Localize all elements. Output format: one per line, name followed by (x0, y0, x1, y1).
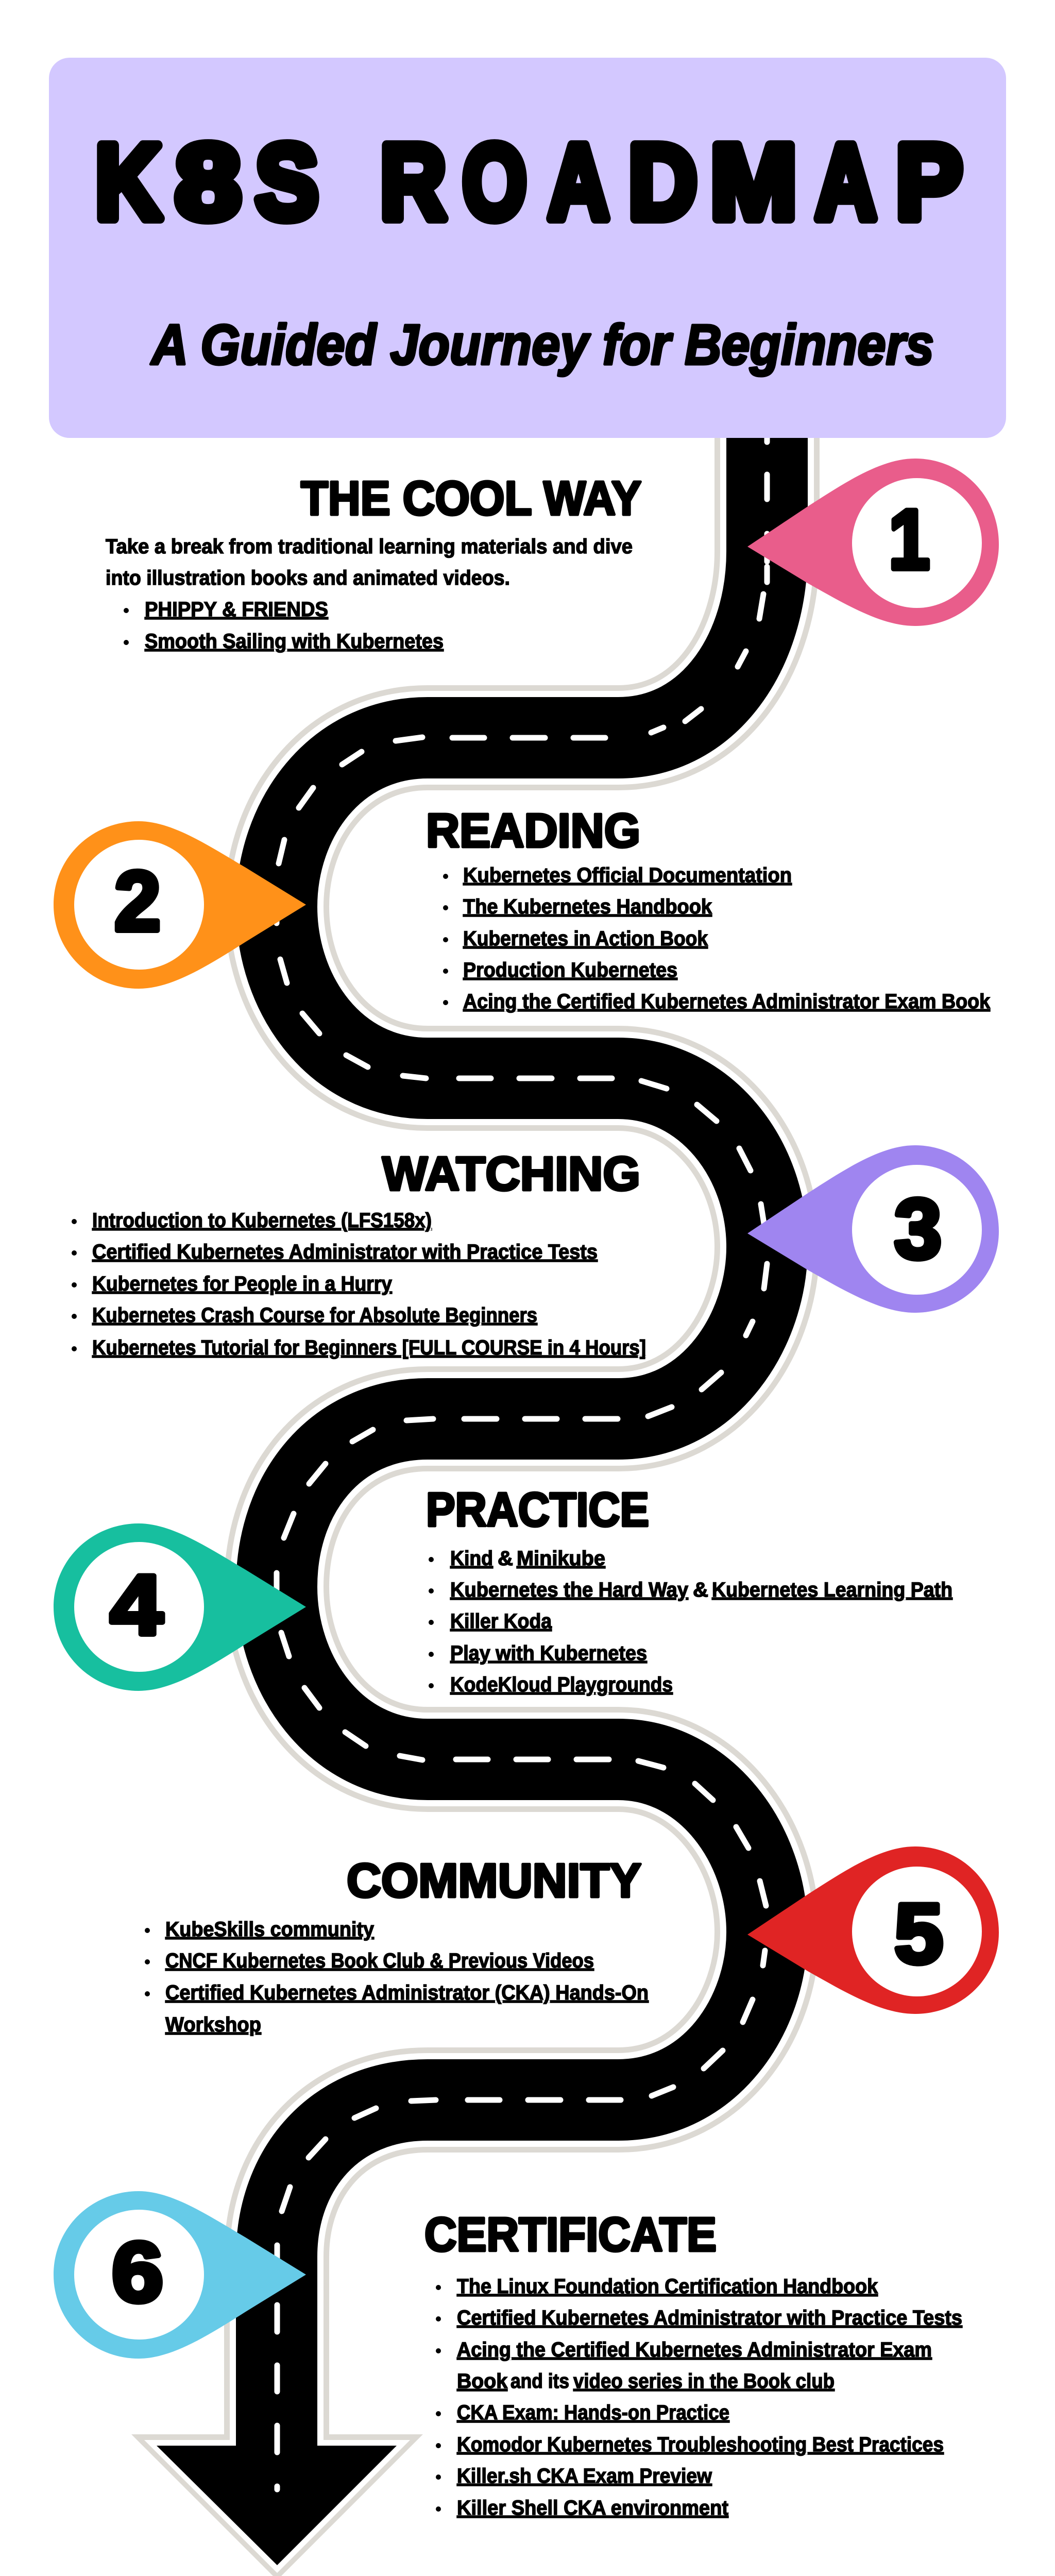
main title: A (815, 123, 876, 241)
link list: Acing the Certified Kubernetes Administrator Exam Book (463, 990, 991, 1013)
main title: K (95, 123, 161, 241)
link list: Minikube (517, 1547, 605, 1570)
link list: Smooth Sailing with Kubernetes (145, 630, 444, 653)
main title: M (710, 123, 797, 241)
link list (429, 1547, 952, 1696)
link list: Play with Kubernetes (450, 1642, 647, 1665)
pin 4: 4 (110, 1557, 163, 1652)
section 6: certificate (424, 2208, 962, 2519)
link list: Certified Kubernetes Administrator (CKA) Hands-On (165, 1981, 649, 2004)
header panel (49, 58, 1006, 438)
link list: Kubernetes Crash Course for Absolute Beginners (92, 1304, 537, 1327)
pin 5: 5 (894, 1886, 943, 1981)
link list: Production Kubernetes (463, 959, 677, 981)
link list (72, 1209, 646, 1359)
heading: PRACTICE (426, 1483, 649, 1536)
pin 4 (54, 1523, 306, 1691)
link list: Acing the Certified Kubernetes Administrator Exam (457, 2338, 932, 2361)
link list: CNCF Kubernetes Book Club & Previous Videos (165, 1950, 594, 1972)
link list: The Kubernetes Handbook (463, 895, 712, 918)
link list: Killer Koda (450, 1610, 552, 1633)
link list (124, 598, 444, 653)
link list: Book (457, 2370, 508, 2393)
link list: Introduction to Kubernetes (LFS158x) (92, 1209, 432, 1232)
main title (95, 123, 962, 241)
link list: Kubernetes Official Documentation (463, 864, 792, 887)
link list: Kubernetes Learning Path (712, 1579, 952, 1601)
link list: Komodor Kubernetes Troubleshooting Best Practices (457, 2433, 944, 2456)
link list: Kind (450, 1547, 493, 1570)
link list: Kubernetes Tutorial for Beginners [FULL COURSE in 4 Hours] (92, 1336, 646, 1359)
main title: D (628, 123, 697, 241)
section 5: community (145, 1854, 649, 2036)
pin 1 (747, 459, 999, 626)
link list: video series in the Book club (573, 2370, 835, 2393)
pin 6 (54, 2191, 306, 2359)
section 3: watching (72, 1147, 646, 1359)
link list: Killer Shell CKA environment (457, 2497, 728, 2519)
intro text: Take a break from traditional learning materials and dive (106, 535, 633, 558)
main title: A (548, 123, 609, 241)
pin 6: 6 (112, 2225, 163, 2319)
link list: The Linux Foundation Certification Handbook (457, 2275, 878, 2298)
winding road with arrow head (131, 433, 767, 2576)
link list (436, 2275, 962, 2519)
link list: Kubernetes the Hard Way (450, 1579, 689, 1601)
link list: KubeSkills community (165, 1918, 375, 1941)
link list: and its (511, 2370, 569, 2393)
intro text (106, 535, 633, 589)
intro text: into illustration books and animated videos. (106, 567, 510, 589)
section 4: practice (426, 1483, 952, 1696)
link list: Workshop (165, 2013, 261, 2036)
main title: 8 (176, 123, 241, 241)
section 2: reading (426, 804, 991, 1013)
pin 5 (747, 1846, 999, 2014)
pin 3: 3 (894, 1181, 942, 1276)
link list: Kubernetes in Action Book (463, 927, 708, 950)
pin 1: 1 (889, 492, 930, 587)
link list: CKA Exam: Hands-on Practice (457, 2401, 729, 2424)
link list: Certified Kubernetes Administrator with Practice Tests (92, 1241, 598, 1263)
link list (145, 1918, 649, 2036)
pin 2 (54, 821, 306, 989)
link list: Killer.sh CKA Exam Preview (457, 2465, 712, 2487)
pin 3 (747, 1145, 999, 1313)
link list: PHIPPY & FRIENDS (145, 598, 328, 621)
heading: CERTIFICATE (424, 2208, 717, 2261)
heading: WATCHING (382, 1147, 640, 1200)
link list: & (693, 1579, 708, 1601)
main title: R (380, 123, 446, 241)
main title: O (463, 123, 526, 241)
link list (443, 864, 991, 1013)
main title: S (256, 123, 318, 241)
link list: & (498, 1547, 513, 1570)
link list: KodeKloud Playgrounds (450, 1673, 673, 1696)
subtitle: A Guided Journey for Beginners (150, 313, 934, 377)
link list: Certified Kubernetes Administrator with Practice Tests (457, 2307, 962, 2329)
link list: Kubernetes for People in a Hurry (92, 1273, 393, 1295)
pin 2: 2 (114, 854, 161, 948)
heading: COMMUNITY (347, 1854, 641, 1907)
section 1: the cool way (106, 471, 641, 653)
heading: READING (426, 804, 640, 857)
main title: P (896, 123, 962, 241)
heading: THE COOL WAY (301, 471, 641, 525)
